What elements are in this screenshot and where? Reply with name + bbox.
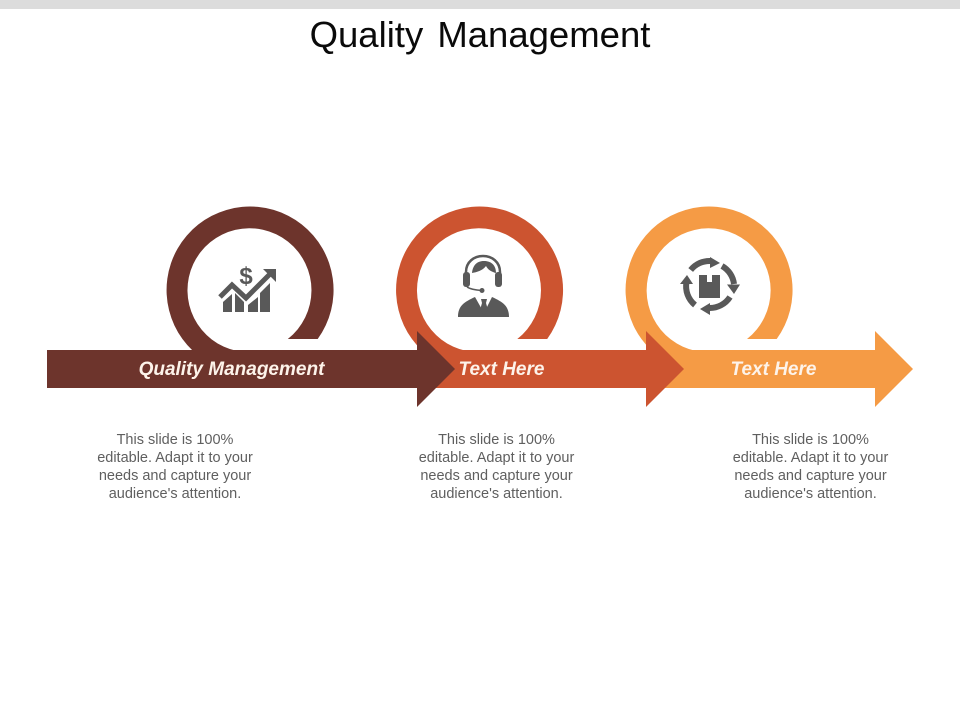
step 1: brown ring and arrow — [47, 207, 455, 407]
title: Quality Management — [310, 14, 650, 55]
icon: growth chart with dollar sign — [220, 263, 276, 312]
icon: support agent with headset — [458, 256, 509, 317]
text block: step 2 description: editable. Adapt it to your — [419, 450, 574, 466]
text block: step 3 description: audience's attention. — [744, 486, 877, 502]
text block: step 3 description: editable. Adapt it to your — [733, 450, 888, 466]
text block: step 2 description: audience's attention. — [430, 486, 563, 502]
step 2: red ring and arrow — [396, 207, 684, 407]
label: step 3: Text Here — [731, 359, 817, 380]
icon: box with circular arrows — [680, 257, 740, 315]
text block: step 1 description: audience's attention. — [109, 486, 241, 502]
label: step 1: Quality Management — [139, 359, 325, 380]
label: step 2: Text Here — [459, 359, 545, 380]
text block: step 1 description: needs and capture your — [99, 468, 251, 484]
icon: growth chart with dollar sign: $ — [239, 263, 253, 290]
text block: step 3 description: needs and capture your — [734, 468, 887, 484]
text block: step 2 description: needs and capture your — [420, 468, 573, 484]
text block: step 1 description: This slide is 100% — [117, 432, 234, 448]
step 3: orange ring and arrow — [626, 207, 913, 407]
text block: step 1 description: editable. Adapt it to your — [97, 450, 253, 466]
text block: step 3 description: This slide is 100% — [752, 432, 869, 448]
text block: step 2 description: This slide is 100% — [438, 432, 555, 448]
